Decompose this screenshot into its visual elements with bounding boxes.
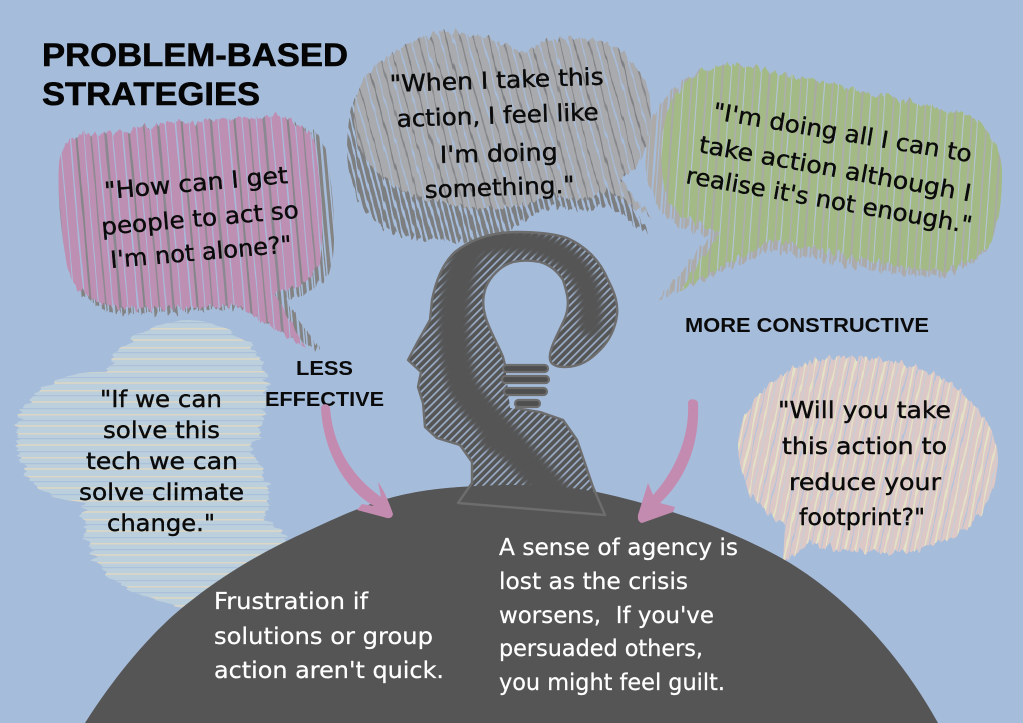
quote text [79, 385, 244, 537]
quote text [778, 396, 951, 531]
arrow: right [638, 399, 698, 523]
speech bubble: get people to act [58, 116, 334, 353]
label: less effective: LESS [296, 358, 353, 380]
quote text [684, 97, 974, 239]
quote text: "Will you take [778, 396, 951, 424]
label: less effective: EFFECTIVE [265, 389, 384, 411]
hill [85, 485, 938, 723]
text: agency lost: A sense of agency is [499, 533, 738, 561]
quote text: I'm not alone?" [109, 230, 293, 274]
text: frustration [214, 587, 444, 684]
lightbulb threads [502, 365, 549, 407]
text: agency lost [499, 533, 738, 696]
label: more constructive: MORE CONSTRUCTIVE [685, 315, 929, 337]
quote text: people to act so [100, 196, 300, 241]
icon: head outline and lightbulb threads [408, 232, 617, 515]
quote text: "If we can [100, 385, 222, 413]
quote text: reduce your [789, 468, 941, 496]
quote text: realise it's not enough." [684, 161, 974, 239]
quote text: this action to [782, 432, 947, 460]
speech bubble: not enough [645, 64, 1002, 300]
quote text: I'm doing [439, 138, 558, 169]
title: STRATEGIES [42, 76, 260, 112]
text: frustration: Frustration if [214, 587, 369, 615]
label: less effective [265, 358, 384, 411]
text: agency lost: lost as the crisis [499, 567, 688, 595]
icon: head with lightbulb (fill) [408, 232, 617, 515]
quote text: something." [424, 171, 575, 204]
quote text [389, 63, 604, 204]
quote text: footprint?" [799, 503, 925, 531]
text: agency lost: you might feel guilt. [499, 668, 725, 696]
quote text: "I'm doing all I can to [711, 97, 974, 168]
speech bubble: reduce footprint [738, 357, 998, 562]
text: frustration: solutions or group [214, 622, 433, 650]
text: agency lost: worsens, If you've [499, 601, 714, 629]
title [42, 37, 348, 112]
quote text: "How can I get [103, 161, 289, 205]
quote text [100, 161, 300, 274]
text: frustration: action aren't quick. [214, 656, 444, 684]
quote text: change." [107, 509, 215, 537]
quote text: solve this [103, 416, 220, 444]
text: agency lost: persuaded others, [499, 634, 703, 662]
arrow: left [321, 404, 393, 518]
thought cloud: tech solution [17, 320, 290, 610]
speech bubble: doing something [347, 32, 652, 243]
title: PROBLEM-BASED [42, 37, 348, 73]
quote text: "When I take this [389, 63, 604, 98]
quote text: action, I feel like [396, 98, 599, 133]
quote text: take action although I [697, 130, 973, 207]
quote text: tech we can [86, 447, 238, 475]
quote text: solve climate [79, 478, 244, 506]
